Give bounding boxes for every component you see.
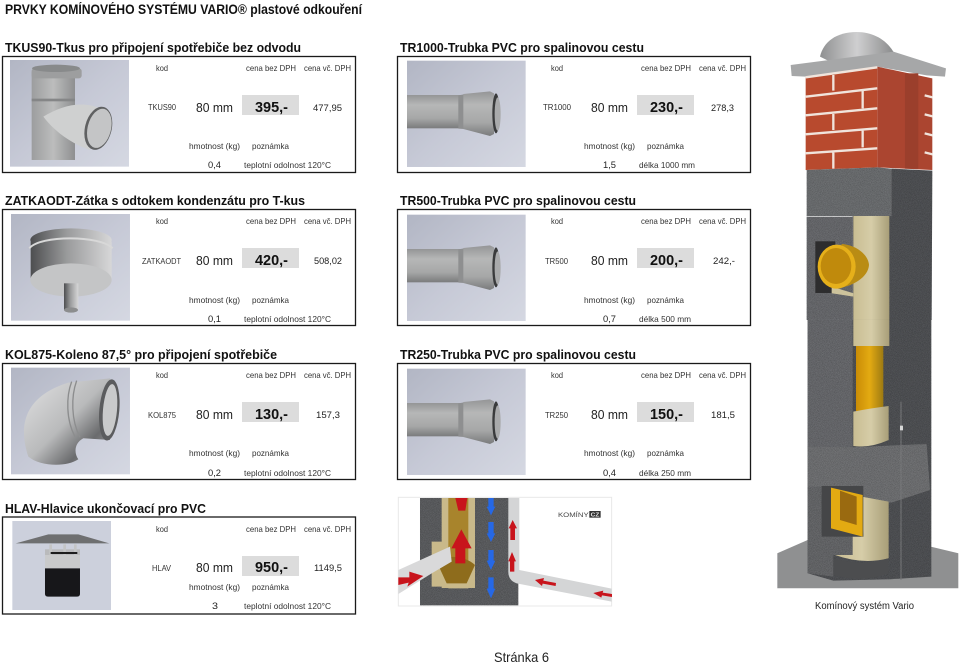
price row: TR1000 xyxy=(543,102,571,112)
weight and note xyxy=(189,141,331,171)
image: T-piece xyxy=(10,60,129,167)
weight and note xyxy=(189,295,331,325)
price row: 157,3 xyxy=(316,410,340,421)
price row: 150,- xyxy=(650,406,683,423)
weight and note: hmotnost (kg) xyxy=(189,448,240,458)
column labels: cena bez DPH xyxy=(641,370,691,380)
weight and note: teplotní odolnost 120°C xyxy=(244,314,331,324)
column labels: cena bez DPH xyxy=(246,63,296,73)
weight and note: délka 250 mm xyxy=(639,468,691,478)
heading: TKUS90-Tkus pro připojení spotřebiče bez odvodu xyxy=(5,41,301,55)
panel: TKUS90 xyxy=(2,41,356,172)
weight and note: 0,2 xyxy=(208,468,221,479)
image: pipe xyxy=(407,61,526,167)
heading: TR500-Trubka PVC pro spalinovou cestu xyxy=(400,194,636,208)
column labels: kod xyxy=(156,216,168,226)
price row: 80 mm xyxy=(591,253,628,268)
weight and note: 1,5 xyxy=(603,160,616,171)
panel: HLAV xyxy=(2,502,356,614)
weight and note: 3 xyxy=(212,601,218,612)
image: pipe xyxy=(407,369,526,475)
price row: ZATKAODT xyxy=(142,256,181,266)
price row: 80 mm xyxy=(591,100,628,115)
panel: ZATKAODT xyxy=(2,194,356,326)
price row: 508,02 xyxy=(314,256,342,267)
panel: TR500 xyxy=(398,194,750,326)
logo: KOMÍNY xyxy=(558,510,589,519)
price row xyxy=(543,95,734,116)
weight and note: poznámka xyxy=(252,141,289,151)
weight and note: 0,7 xyxy=(603,314,616,325)
column labels: cena bez DPH xyxy=(246,216,296,226)
price row: 1149,5 xyxy=(314,563,342,574)
price row: 200,- xyxy=(650,252,683,269)
column labels xyxy=(156,524,351,534)
price row: 80 mm xyxy=(196,407,233,422)
weight and note: poznámka xyxy=(647,295,684,305)
column labels: cena vč. DPH xyxy=(699,370,746,380)
red arrows xyxy=(398,498,612,598)
inlet pipe xyxy=(398,547,452,594)
heading: HLAV-Hlavice ukončovací pro PVC xyxy=(5,502,206,516)
frame xyxy=(2,56,356,172)
price row: HLAV xyxy=(152,563,171,573)
panel: TR1000 xyxy=(398,41,750,172)
column labels: cena bez DPH xyxy=(246,524,296,534)
weight and note xyxy=(584,295,691,325)
column labels: kod xyxy=(156,63,168,73)
price row: 80 mm xyxy=(196,253,233,268)
frame xyxy=(398,364,750,480)
weight and note xyxy=(189,448,331,479)
price row xyxy=(148,95,342,116)
column labels: kod xyxy=(551,216,563,226)
heading: ZATKAODT-Zátka s odtokem kondenzátu pro T-kus xyxy=(5,194,305,208)
weight and note: teplotní odolnost 120°C xyxy=(244,601,331,611)
column labels: cena bez DPH xyxy=(641,216,691,226)
column labels: kod xyxy=(551,370,563,380)
price row: TR250 xyxy=(545,410,568,420)
weight and note: hmotnost (kg) xyxy=(584,448,635,458)
price row: 130,- xyxy=(255,406,288,423)
column labels: cena vč. DPH xyxy=(699,63,746,73)
weight and note: 0,4 xyxy=(603,468,617,479)
column labels: cena vč. DPH xyxy=(304,524,351,534)
weight and note: hmotnost (kg) xyxy=(584,295,635,305)
weight and note: hmotnost (kg) xyxy=(584,141,635,151)
weight and note: poznámka xyxy=(252,295,289,305)
column labels: kod xyxy=(156,370,168,380)
flue airflow diagram xyxy=(398,497,612,606)
price row xyxy=(142,248,342,269)
panel: TR250 xyxy=(398,348,750,480)
weight and note xyxy=(189,582,331,612)
weight and note: poznámka xyxy=(647,448,684,458)
price row: 395,- xyxy=(255,99,288,116)
caption: Komínový systém Vario xyxy=(815,601,914,612)
price row xyxy=(545,248,735,269)
column labels: cena vč. DPH xyxy=(304,370,351,380)
weight and note: délka 1000 mm xyxy=(639,160,695,170)
chimney upper part xyxy=(791,32,946,320)
heading: TR1000-Trubka PVC pro spalinovou cestu xyxy=(400,41,644,55)
title: PRVKY KOMÍNOVÉHO SYSTÉMU VARIO® plastové odkouření xyxy=(5,2,363,17)
weight and note xyxy=(584,448,691,479)
weight and note: délka 500 mm xyxy=(639,314,691,324)
weight and note xyxy=(584,141,695,171)
column labels: cena bez DPH xyxy=(641,63,691,73)
image: terminal cowl xyxy=(12,521,111,610)
weight and note: hmotnost (kg) xyxy=(189,295,240,305)
weight and note: 0,1 xyxy=(208,314,221,325)
heading: KOL875-Koleno 87,5° pro připojení spotřebiče xyxy=(5,348,277,362)
column labels xyxy=(156,370,351,380)
concentric air pipe xyxy=(508,498,612,602)
image: condensate plug xyxy=(11,214,130,321)
weight and note: hmotnost (kg) xyxy=(189,141,240,151)
price row: 420,- xyxy=(255,252,288,269)
price row: 230,- xyxy=(650,99,683,116)
column labels: kod xyxy=(551,63,563,73)
heading: TR250-Trubka PVC pro spalinovou cestu xyxy=(400,348,636,362)
image: pipe xyxy=(407,215,526,321)
price row: KOL875 xyxy=(148,410,176,420)
weight and note: teplotní odolnost 120°C xyxy=(244,468,331,478)
price row xyxy=(148,402,340,423)
frame xyxy=(2,364,356,480)
frame xyxy=(398,210,750,326)
price row: 950,- xyxy=(255,559,288,576)
column labels: cena vč. DPH xyxy=(304,216,351,226)
weight and note: poznámka xyxy=(252,582,289,592)
column labels xyxy=(551,63,746,73)
weight and note: teplotní odolnost 120°C xyxy=(244,160,331,170)
weight and note: poznámka xyxy=(252,448,289,458)
price row: TKUS90 xyxy=(148,102,176,112)
column labels xyxy=(156,63,351,73)
price row xyxy=(152,556,342,576)
price row: 477,95 xyxy=(313,103,342,114)
frame xyxy=(2,210,356,326)
blue arrows xyxy=(487,498,495,598)
logo xyxy=(558,510,601,519)
price row: 80 mm xyxy=(196,100,233,115)
column labels: cena vč. DPH xyxy=(699,216,746,226)
price row: 181,5 xyxy=(711,410,735,421)
price row: 278,3 xyxy=(711,103,734,114)
chimney lower part xyxy=(777,320,958,588)
price row: 242,- xyxy=(713,256,735,267)
column labels: cena bez DPH xyxy=(246,370,296,380)
price row: TR500 xyxy=(545,256,568,266)
column labels xyxy=(551,370,746,380)
column labels: kod xyxy=(156,524,168,534)
price row xyxy=(545,402,735,423)
frame xyxy=(2,517,356,614)
column labels xyxy=(156,216,351,226)
price row: 80 mm xyxy=(591,407,628,422)
weight and note: poznámka xyxy=(647,141,684,151)
frame xyxy=(398,56,750,172)
weight and note: hmotnost (kg) xyxy=(189,582,240,592)
logo: CZ xyxy=(591,513,600,519)
column labels: cena vč. DPH xyxy=(304,63,351,73)
panel: KOL875 xyxy=(2,348,356,480)
weight and note: 0,4 xyxy=(208,160,222,171)
chimney illustration xyxy=(777,32,958,612)
image: elbow xyxy=(11,368,130,474)
column labels xyxy=(551,216,746,226)
price row: 80 mm xyxy=(196,560,233,575)
